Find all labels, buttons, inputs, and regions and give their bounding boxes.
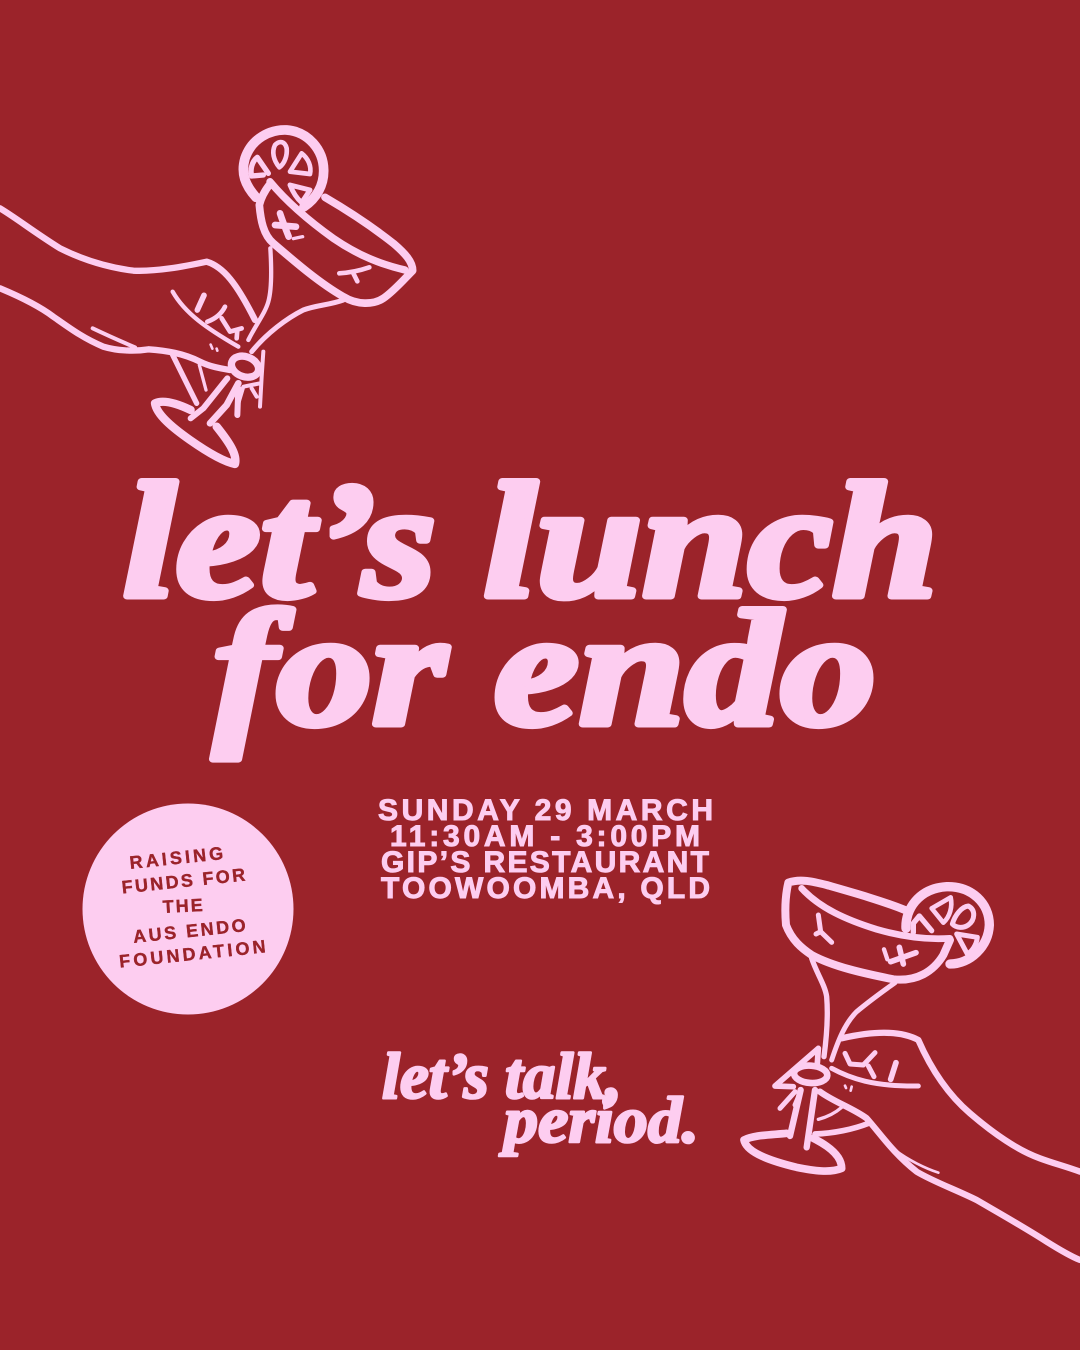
event details	[378, 794, 713, 905]
date: SUNDAY 29 MARCH	[378, 794, 713, 827]
time: 11:30AM - 3:00PM	[390, 820, 700, 853]
illustration: hand raising cocktail, bottom right	[744, 881, 1080, 1260]
icon: hand and forearm	[0, 208, 255, 370]
logo line 2: period.	[499, 1084, 699, 1157]
illustration: hand raising cocktail, top left	[0, 130, 413, 464]
title	[123, 449, 938, 760]
icon: hand and forearm	[820, 1033, 1080, 1260]
badge text	[118, 843, 267, 972]
venue: GIP’S RESTAURANT	[381, 846, 709, 879]
icon: cocktail glass	[744, 881, 950, 1171]
title line 1: let’s lunch	[123, 449, 938, 632]
badge: fundraising circle	[82, 804, 294, 1014]
badge text: FOUNDATION	[118, 936, 267, 972]
badge text: RAISING	[129, 843, 224, 873]
badge text: AUS ENDO	[132, 915, 247, 947]
location: TOOWOOMBA, QLD	[381, 872, 710, 905]
icon: lime slice	[243, 130, 324, 207]
logo: let's talk, period.	[382, 1040, 699, 1157]
badge text: THE	[162, 895, 203, 917]
icon: cocktail glass	[155, 182, 413, 464]
logo line 1: let’s talk,	[382, 1040, 622, 1113]
icon: lime slice	[906, 887, 989, 964]
title line 2: for endo	[213, 577, 876, 760]
badge circle	[82, 804, 294, 1014]
badge text: FUNDS FOR	[121, 865, 246, 897]
